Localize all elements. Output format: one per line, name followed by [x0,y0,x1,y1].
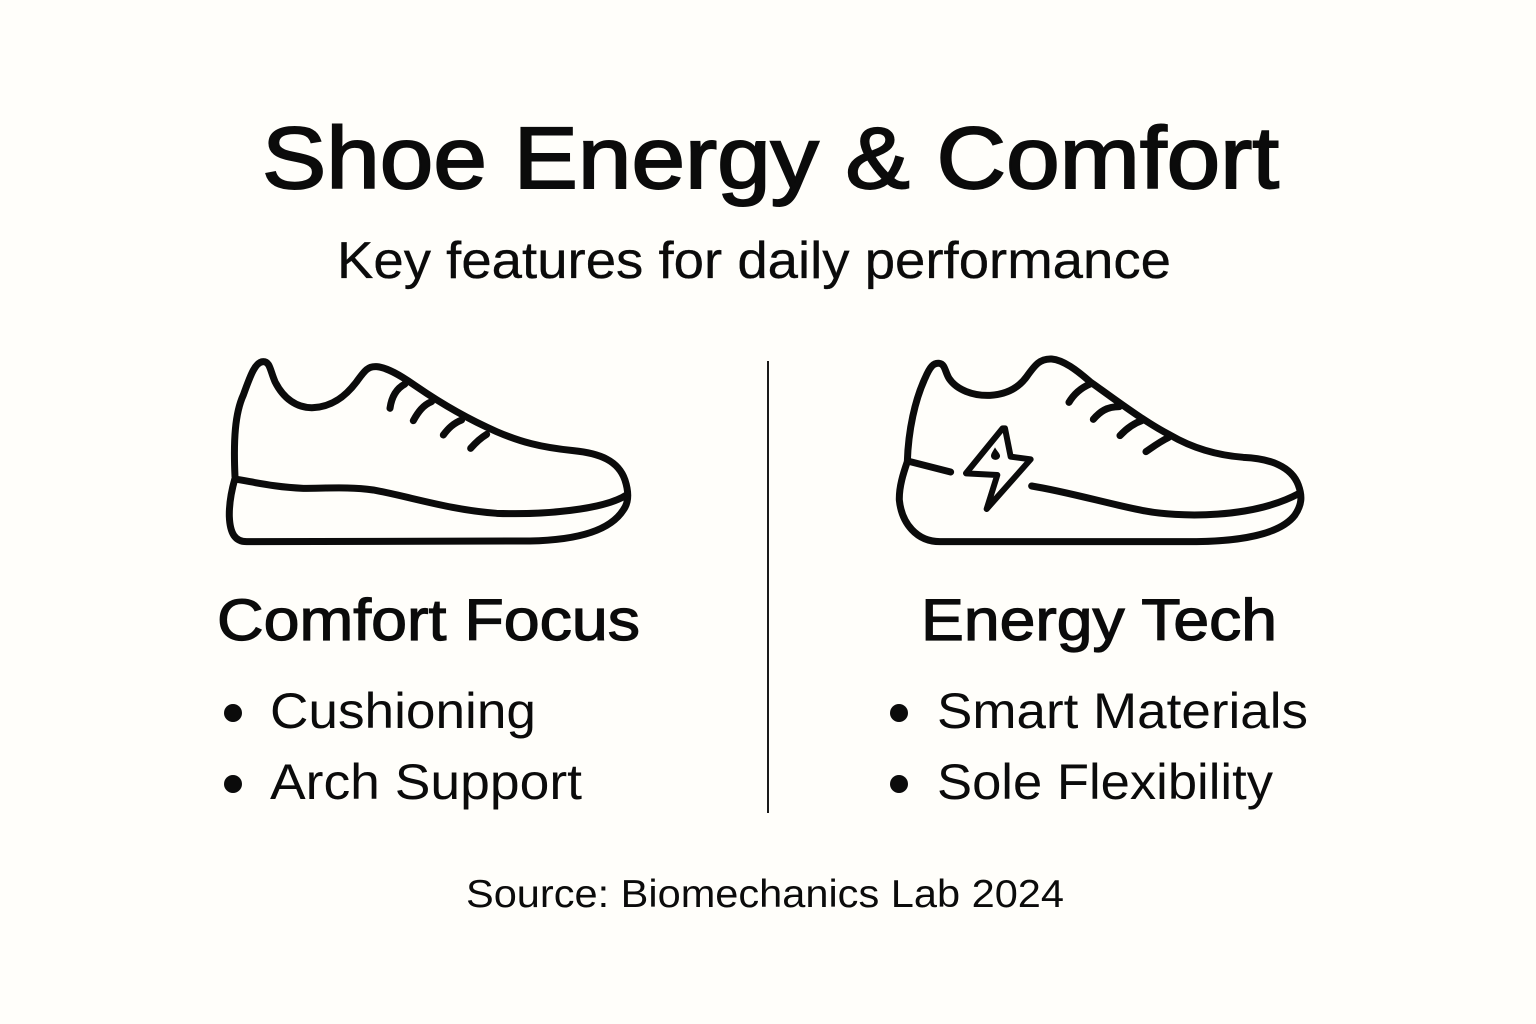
list: comfort features [224,683,582,810]
icon: comfort shoe [229,362,628,542]
subtitle: Key features for daily performance [337,232,1171,290]
panel: comfort focus [217,588,640,810]
panel: energy tech [890,588,1308,810]
list: comfort features: Arch Support [270,754,582,810]
heading: energy tech: Energy Tech [921,588,1277,653]
heading: comfort focus: Comfort Focus [217,588,640,653]
divider [767,361,769,813]
title: Shoe Energy & Comfort [262,110,1279,207]
list: energy features [890,683,1308,810]
list: comfort features: Cushioning [270,683,536,739]
list: energy features: Smart Materials [937,683,1308,739]
source note: Source: Biomechanics Lab 2024 [466,873,1064,916]
icon: energy shoe with lightning bolt [899,359,1301,542]
list: energy features: Sole Flexibility [937,754,1273,810]
